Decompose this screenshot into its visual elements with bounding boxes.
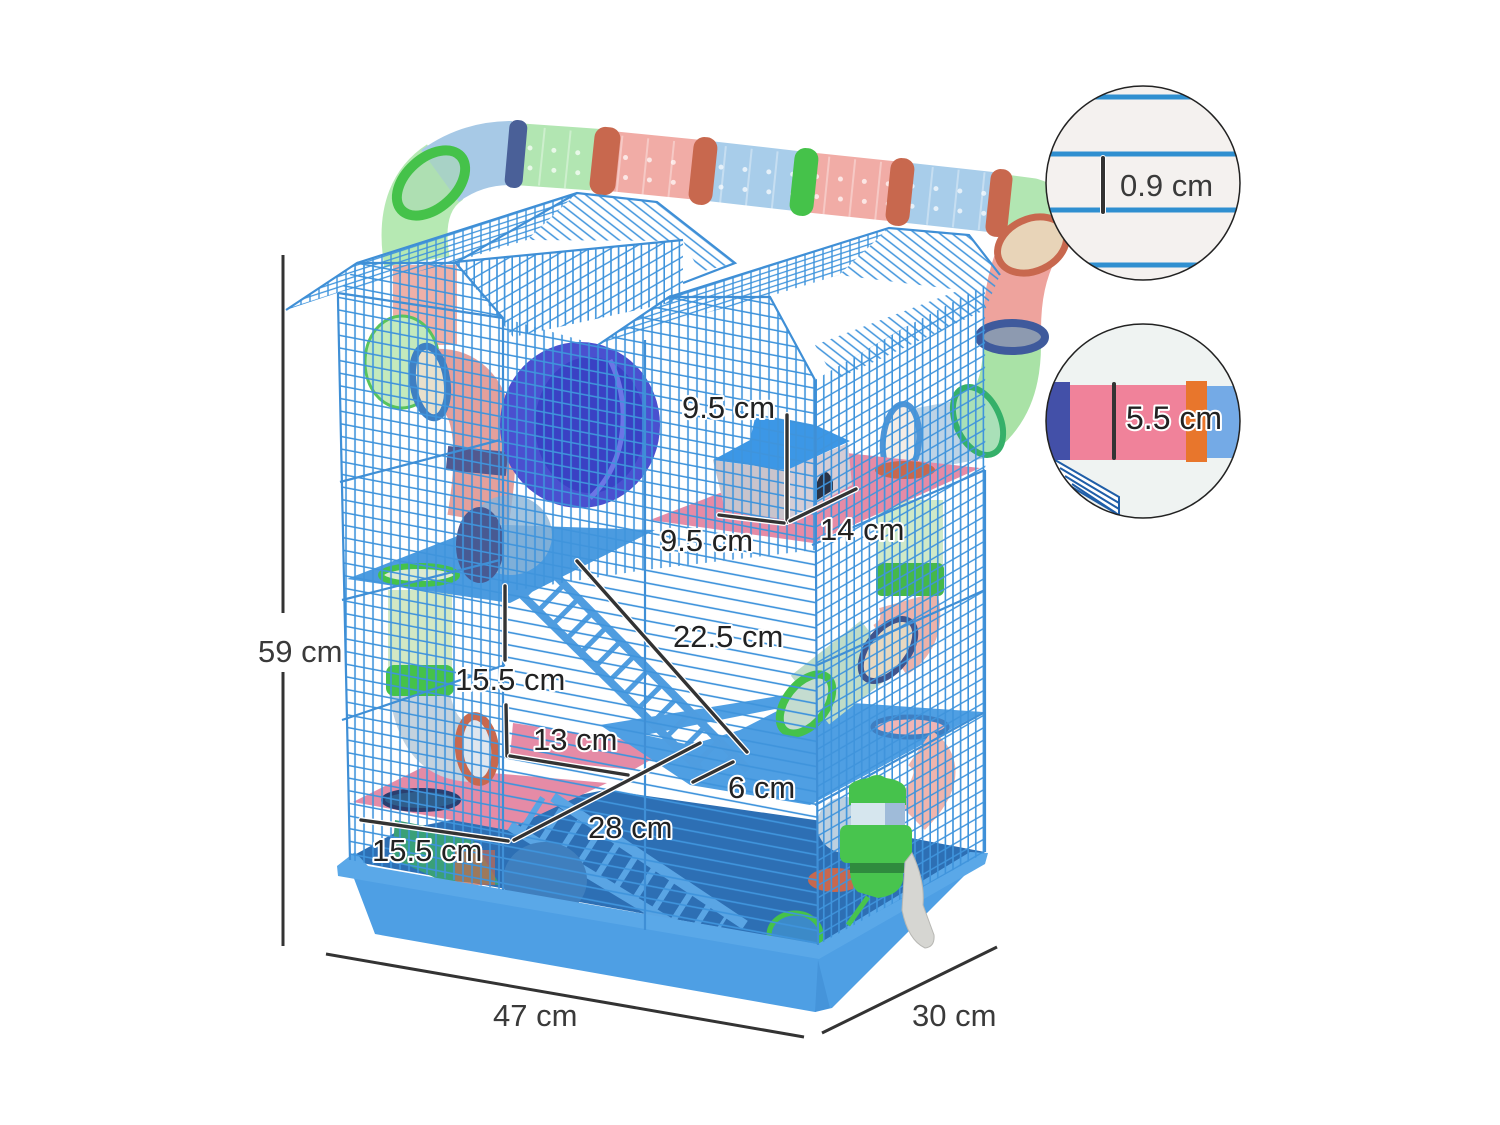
- ring: navy: [504, 119, 528, 189]
- dimension: ramp 22.5: [577, 561, 747, 752]
- ring: green collar: [876, 563, 944, 596]
- water bottle: [840, 775, 912, 925]
- exercise wheel: [500, 342, 660, 508]
- ring: salmon opening: [988, 206, 1076, 284]
- label: 15.5 cm upper: 15.5 cm: [455, 662, 565, 697]
- ring: green hole: [381, 566, 457, 584]
- callout: tube diameter: [1046, 324, 1243, 518]
- tube: green diagonal: [810, 645, 880, 700]
- tray body: [337, 852, 988, 1012]
- little house: [713, 418, 852, 520]
- label: 28 cm: 28 cm: [588, 810, 672, 845]
- dimension: level height 15.5: [505, 586, 507, 756]
- dimension: house depth: [790, 489, 856, 521]
- ring: salmon 4: [985, 168, 1013, 238]
- tube: navy and blue connector: [456, 495, 552, 583]
- tube: bottom left green: [392, 820, 587, 918]
- interior labels: [372, 390, 904, 868]
- ring: green collar: [386, 665, 454, 696]
- height dimension line: 59 cm: [282, 255, 284, 946]
- tube: lower left green: [386, 590, 498, 784]
- label: 15.5 cm lower: 15.5 cm: [372, 833, 482, 868]
- front wall wire: upper: [338, 262, 815, 890]
- ring: blue opening: [408, 344, 452, 420]
- dimension: house width: [719, 515, 784, 523]
- tray: side wall: [350, 855, 975, 1012]
- bottle clip: [902, 853, 934, 948]
- dimension: 15.5 cm lower: [361, 820, 508, 841]
- pink platform: lower left: [353, 767, 607, 830]
- blue platform: lower right: [600, 695, 983, 805]
- ring: salmon 3: [885, 157, 915, 227]
- label: 30 cm: 30 cm: [912, 998, 996, 1033]
- ball: green connector: [365, 316, 439, 408]
- bottle: green holder: [840, 825, 912, 863]
- tray: rim: [337, 852, 988, 959]
- house: lavender side: [785, 443, 852, 520]
- house: blue roof: [713, 418, 850, 470]
- dimension: 13 cm: [510, 756, 628, 775]
- bottle: nozzle body: [850, 868, 903, 898]
- label: 59 cm: 59 cm: [258, 634, 342, 669]
- dimension: house height: [784, 415, 790, 522]
- interior dimensions: [361, 415, 856, 841]
- house: grey front: [713, 460, 788, 520]
- tube: green curve: [978, 345, 1012, 428]
- ring: navy collar: [850, 609, 926, 691]
- ring: salmon end: [456, 714, 498, 784]
- ring: salmon 1: [589, 126, 621, 196]
- tube: blue opening: [915, 428, 978, 440]
- roof: right hatch panel: [815, 228, 1000, 380]
- tube: pink straight 2: [805, 182, 900, 192]
- tube: blue straight 2: [900, 192, 1000, 203]
- house: door: [817, 472, 833, 500]
- roof: left hatch panel: [527, 193, 735, 272]
- label: 5.5 cm: 5.5 cm: [1126, 400, 1222, 436]
- label: 9.5 cm top: 9.5 cm: [682, 390, 775, 425]
- ring: navy collar: [979, 323, 1045, 351]
- tube: pink bend: [1012, 245, 1030, 330]
- tube: pink vertical: [393, 265, 457, 345]
- tube behind lower right platform: [910, 748, 934, 815]
- tray: lower lip shading: [815, 960, 830, 1012]
- ladder: bottom ramp: [510, 797, 745, 935]
- label: 14 cm: 14 cm: [820, 512, 904, 547]
- side wall wire: [815, 285, 986, 945]
- width dimension line: 47 cm: [326, 954, 804, 1037]
- tube ribs: [515, 154, 1000, 203]
- tube: bottom right: [769, 797, 873, 957]
- roof: left dense panel: [286, 193, 577, 310]
- tube: blue straight 1: [700, 170, 805, 182]
- ring: green end: [769, 665, 843, 743]
- tube: green straight: [515, 154, 600, 160]
- cage frame outlines: [286, 193, 1000, 945]
- ladder: upper ramp: [517, 573, 748, 770]
- right tube run: [880, 206, 1076, 479]
- white gaps in lower platform: [645, 707, 785, 745]
- depth dimension line: 30 cm: [822, 947, 997, 1033]
- tube: pink elbow: [432, 380, 484, 520]
- front wall wire: lower middle: [505, 550, 818, 945]
- left tube run: [365, 265, 507, 520]
- label: 6 cm: 6 cm: [728, 770, 795, 805]
- tube: navy collar: [447, 458, 507, 464]
- tray interior: [345, 790, 985, 945]
- label: 9.5 cm bottom: 9.5 cm: [660, 523, 753, 558]
- tube: green end: [1000, 203, 1044, 240]
- dimension: 28 cm: [514, 743, 700, 840]
- label: 22.5 cm: 22.5 cm: [673, 619, 783, 654]
- dimension: 6 cm: [693, 762, 733, 782]
- house side wire: [455, 240, 683, 337]
- bottle: spout: [848, 897, 868, 925]
- label: 47 cm: 47 cm: [493, 998, 577, 1033]
- tube: right middle pink green: [769, 500, 944, 743]
- ring: green on bend: [385, 138, 477, 228]
- tube air holes: [530, 148, 1000, 215]
- tube socket on top platform: [875, 461, 935, 479]
- label: 13 cm: 13 cm: [533, 722, 617, 757]
- ring: blue and salmon end: [880, 403, 922, 479]
- tube: green bend: [415, 172, 445, 262]
- roof: right dense panel: [598, 228, 889, 345]
- ring: salmon 2: [688, 136, 718, 206]
- blue platform: upper left: [347, 524, 655, 603]
- label: 0.9 cm: 0.9 cm: [1120, 168, 1213, 203]
- callout: wire spacing: [1040, 86, 1250, 280]
- bottle: clear body: [851, 803, 905, 863]
- pink platform: back lower: [510, 723, 673, 770]
- pink platform: top right: [650, 453, 980, 543]
- bottle: cap: [849, 775, 906, 805]
- tube: blue bend: [440, 153, 512, 176]
- ring: green middle: [789, 147, 819, 217]
- hole in lower right platform: [873, 717, 947, 737]
- ring: green: [943, 379, 1013, 463]
- tube: pink straight 1: [600, 160, 700, 170]
- hole in pink platform: [383, 790, 459, 810]
- top tube run: [385, 119, 1044, 262]
